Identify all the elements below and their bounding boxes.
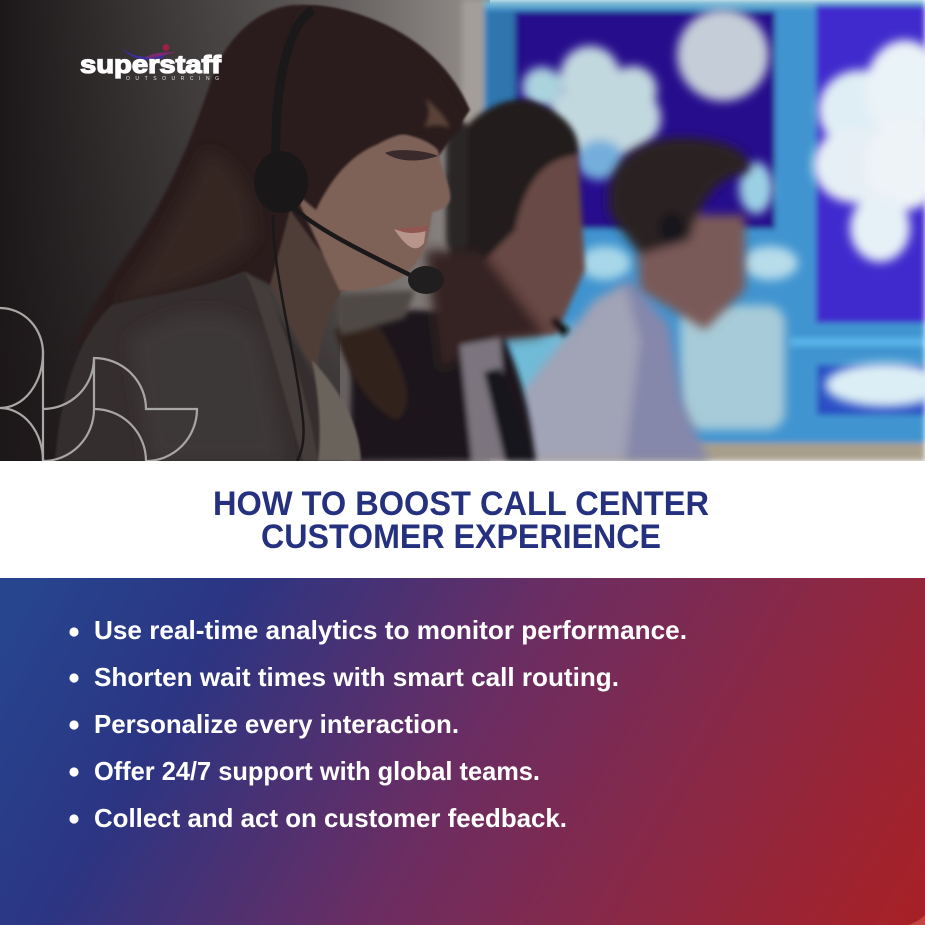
title band — [0, 461, 925, 578]
woman's eye — [385, 150, 438, 161]
blurred agent middle — [350, 99, 585, 461]
logo: superstaff outsourcing — [80, 44, 222, 82]
tip 5: Collect and act on customer feedback. — [94, 803, 567, 833]
tip 1: Use real-time analytics to monitor performance. — [94, 615, 687, 645]
woman's neck and face — [270, 131, 450, 375]
woman's smile — [394, 228, 426, 248]
blurred clouds on screens — [505, 9, 925, 430]
panel: tips list — [0, 578, 925, 925]
photo: call center agents — [0, 0, 925, 461]
wall background — [0, 0, 490, 461]
rounded corner accent — [908, 915, 925, 925]
blurred wall screens — [462, 0, 925, 461]
logo wordmark: superstaff — [80, 51, 222, 79]
woman's headset — [254, 10, 444, 461]
blurred agent far right — [522, 138, 749, 461]
title — [213, 485, 709, 556]
woman's hair highlights — [134, 160, 250, 294]
woman's fringe — [280, 6, 461, 210]
logo swoosh — [120, 46, 168, 60]
fringe highlight — [424, 98, 450, 128]
woman's back hair over shoulder — [335, 315, 407, 420]
tip 2: Shorten wait times with smart call routing. — [94, 662, 619, 692]
decorative geometric line art — [0, 308, 197, 461]
tip 3: Personalize every interaction. — [94, 709, 459, 739]
light wall gap below chin — [335, 290, 415, 335]
woman's hair back — [89, 4, 472, 320]
woman's jacket — [55, 272, 345, 461]
woman's lips — [396, 226, 428, 233]
title: CUSTOMER EXPERIENCE — [261, 518, 661, 556]
title: HOW TO BOOST CALL CENTER — [213, 485, 709, 523]
logo tagline: OUTSOURCING — [126, 76, 219, 82]
tip 4: Offer 24/7 support with global teams. — [94, 756, 540, 786]
